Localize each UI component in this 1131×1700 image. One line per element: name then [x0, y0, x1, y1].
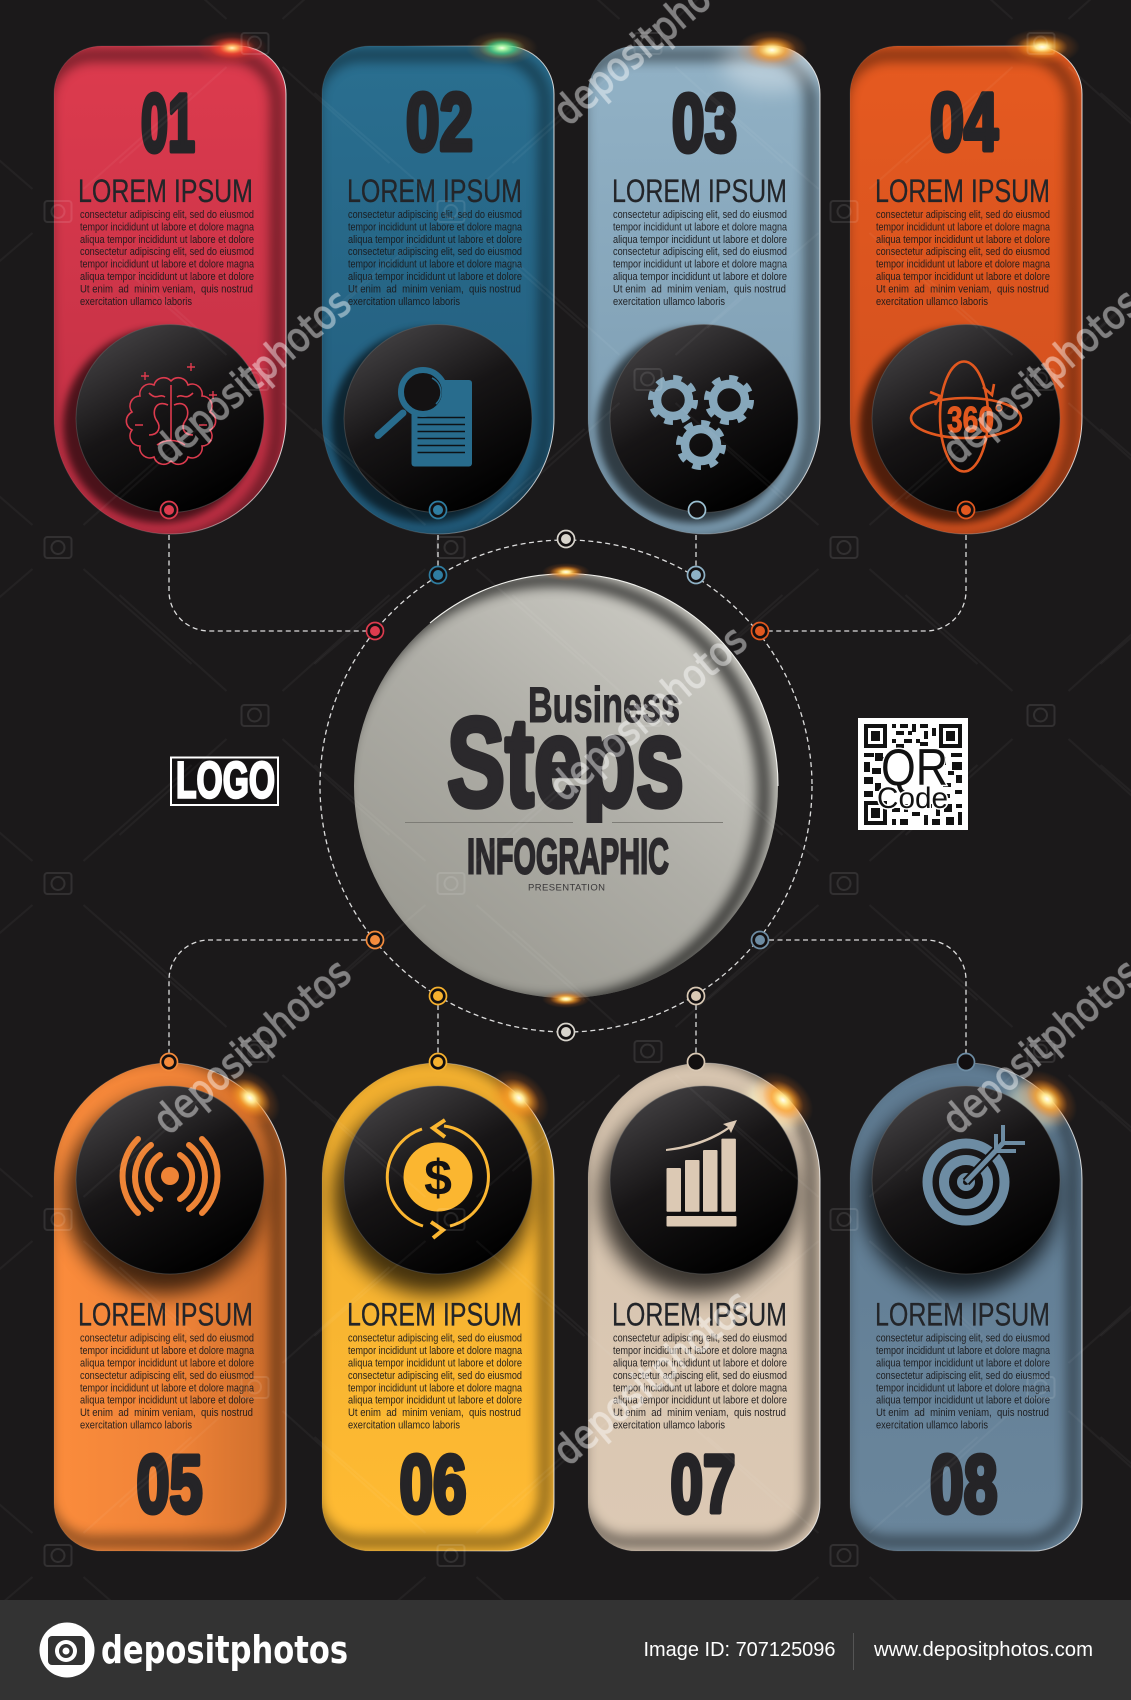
watermark text: depositphotos: [145, 280, 360, 474]
body text: aliqua tempor incididunt ut labore et dolore: [876, 1395, 1050, 1407]
connector dot: [688, 1054, 704, 1070]
QR code: Code: [877, 782, 948, 815]
glow: [1006, 1059, 1088, 1139]
body text: exercitation ullamco laboris: [348, 1420, 460, 1432]
body text: tempor incididunt ut labore et dolore magna: [876, 1345, 1051, 1357]
body text: aliqua tempor incididunt ut labore et dolore: [613, 1358, 787, 1370]
icon: magnifier and document: [378, 370, 472, 466]
body text: Ut enim ad minim veniam, quis nostrud: [613, 283, 786, 295]
number: 01: [141, 78, 195, 169]
body text: tempor incididunt ut labore et dolore magna: [348, 1382, 523, 1394]
number: 03: [672, 78, 737, 169]
glow: [742, 1060, 824, 1140]
panel: step 05 orange: [45, 1054, 291, 1551]
body text: aliqua tempor incididunt ut labore et dolore: [613, 234, 787, 246]
body text: Ut enim ad minim veniam, quis nostrud: [348, 283, 521, 295]
body text: exercitation ullamco laboris: [348, 296, 460, 308]
body text: aliqua tempor incididunt ut labore et dolore: [348, 234, 522, 246]
watermark text: depositphotos: [541, 617, 756, 811]
body text: Ut enim ad minim veniam, quis nostrud: [613, 1407, 786, 1419]
central circle: [340, 563, 778, 1008]
glow: [478, 1058, 560, 1138]
footer bar: [0, 1600, 1131, 1700]
number: 04: [930, 77, 998, 168]
footer wordmark: depositphotos: [101, 1628, 348, 1672]
connector dot: [160, 1054, 178, 1070]
QR code: [858, 718, 968, 830]
body text: consectetur adipiscing elit, sed do eiusmod: [80, 1333, 254, 1345]
body text: Ut enim ad minim veniam, quis nostrud: [876, 1407, 1049, 1419]
glow: [209, 1058, 291, 1138]
disc: [76, 1086, 264, 1274]
body text: consectetur adipiscing elit, sed do eiusmod: [876, 1370, 1050, 1382]
icon: growth bar chart: [666, 1120, 737, 1226]
body text: consectetur adipiscing elit, sed do eiusmod: [348, 1333, 522, 1345]
heading: LOREM IPSUM: [347, 1296, 522, 1332]
body text: exercitation ullamco laboris: [80, 296, 192, 308]
watermark text: depositphotos: [145, 950, 360, 1144]
body text: aliqua tempor incididunt ut labore et dolore: [876, 271, 1050, 283]
dashed connector network: [169, 518, 966, 1054]
panel: step 02 blue: [313, 31, 554, 543]
body text: aliqua tempor incididunt ut labore et dolore: [348, 1395, 522, 1407]
number: 08: [930, 1439, 998, 1530]
body text: consectetur adipiscing elit, sed do eiusmod: [348, 246, 522, 258]
body text: exercitation ullamco laboris: [613, 296, 725, 308]
disc: [872, 1086, 1060, 1274]
panel: step 08 steel blue: [841, 1054, 1088, 1551]
body text: tempor incididunt ut labore et dolore magna: [613, 259, 788, 271]
icon: footer camera logo: [40, 1622, 94, 1678]
footer url: www.depositphotos.com: [873, 1639, 1093, 1661]
body text: tempor incididunt ut labore et dolore magna: [876, 259, 1051, 271]
icon: dollar coin with arrows: $: [424, 1150, 452, 1206]
body text: aliqua tempor incididunt ut labore et dolore: [876, 234, 1050, 246]
body text: [613, 209, 788, 308]
body text: consectetur adipiscing elit, sed do eiusmod: [80, 246, 254, 258]
body text: exercitation ullamco laboris: [613, 1420, 725, 1432]
body text: exercitation ullamco laboris: [876, 1420, 988, 1432]
title: Business: Business: [528, 677, 680, 733]
connector dot: [958, 1054, 974, 1070]
body text: consectetur adipiscing elit, sed do eiusmod: [348, 1370, 522, 1382]
body text: tempor incididunt ut labore et dolore magna: [613, 221, 788, 233]
body text: [348, 1333, 523, 1432]
icon: gears: [651, 378, 751, 467]
glow: top: [542, 563, 590, 581]
body text: tempor incididunt ut labore et dolore magna: [613, 1382, 788, 1394]
body text: aliqua tempor incididunt ut labore et dolore: [80, 1395, 254, 1407]
heading: LOREM IPSUM: [78, 1296, 253, 1332]
panel: step 01 red: [45, 31, 286, 543]
icon: signal broadcast: [123, 1139, 217, 1213]
body text: tempor incididunt ut labore et dolore magna: [348, 259, 523, 271]
body text: aliqua tempor incididunt ut labore et dolore: [613, 1395, 787, 1407]
disc: [344, 324, 532, 512]
icon: 360 rotation: [911, 362, 1021, 472]
panel: step 03 light blue: [579, 30, 822, 543]
body text: tempor incididunt ut labore et dolore magna: [876, 1382, 1051, 1394]
QR label: QR: [881, 739, 948, 797]
logo: LOGO: [176, 752, 275, 808]
body text: consectetur adipiscing elit, sed do eiusmod: [613, 209, 787, 221]
body text: consectetur adipiscing elit, sed do eiusmod: [613, 1333, 787, 1345]
heading: LOREM IPSUM: [875, 1296, 1050, 1332]
body text: aliqua tempor incididunt ut labore et dolore: [80, 271, 254, 283]
body text: Ut enim ad minim veniam, quis nostrud: [80, 1407, 253, 1419]
body text: [613, 1333, 788, 1432]
connector dot: [958, 502, 974, 518]
number: 05: [136, 1439, 202, 1530]
panel: step 07 beige: [579, 1054, 824, 1551]
heading: LOREM IPSUM: [875, 173, 1050, 209]
heading: LOREM IPSUM: [78, 173, 253, 209]
body text: aliqua tempor incididunt ut labore et dolore: [348, 271, 522, 283]
panel: step 06 yellow: [313, 1054, 560, 1551]
connector dot: [160, 502, 178, 518]
icon: brain: [126, 363, 217, 464]
body text: tempor incididunt ut labore et dolore magna: [80, 1382, 255, 1394]
connector dot: [430, 502, 446, 518]
body text: consectetur adipiscing elit, sed do eiusmod: [876, 209, 1050, 221]
title rule: [405, 822, 723, 824]
body text: consectetur adipiscing elit, sed do eiusmod: [876, 246, 1050, 258]
heading: LOREM IPSUM: [347, 173, 522, 209]
body text: tempor incididunt ut labore et dolore magna: [348, 221, 523, 233]
body text: tempor incididunt ut labore et dolore magna: [348, 1345, 523, 1357]
body text: [80, 1333, 255, 1432]
body text: aliqua tempor incididunt ut labore et dolore: [876, 1358, 1050, 1370]
body text: aliqua tempor incididunt ut labore et dolore: [348, 1358, 522, 1370]
number: 06: [400, 1439, 466, 1530]
body text: tempor incididunt ut labore et dolore magna: [80, 1345, 255, 1357]
body text: [348, 209, 523, 308]
icon: target with arrow: [928, 1125, 1025, 1220]
body text: aliqua tempor incididunt ut labore et dolore: [80, 234, 254, 246]
heading: LOREM IPSUM: [612, 173, 787, 209]
watermark text: depositphotos: [545, 1281, 760, 1475]
body text: aliqua tempor incididunt ut labore et dolore: [613, 271, 787, 283]
body text: [80, 209, 255, 308]
body text: aliqua tempor incididunt ut labore et dolore: [80, 1358, 254, 1370]
body text: tempor incididunt ut labore et dolore magna: [80, 259, 255, 271]
panel: step 04 orange-red: [841, 29, 1082, 543]
body text: Ut enim ad minim veniam, quis nostrud: [80, 283, 253, 295]
glow: [196, 31, 268, 65]
body text: Ut enim ad minim veniam, quis nostrud: [876, 283, 1049, 295]
disc: [76, 324, 264, 512]
body text: consectetur adipiscing elit, sed do eiusmod: [613, 1370, 787, 1382]
body text: [876, 209, 1051, 308]
body text: tempor incididunt ut labore et dolore magna: [613, 1345, 788, 1357]
connector dot: [430, 1054, 446, 1070]
body text: exercitation ullamco laboris: [80, 1420, 192, 1432]
body text: consectetur adipiscing elit, sed do eiusmod: [348, 209, 522, 221]
glow: [466, 31, 538, 65]
disc: [610, 1086, 798, 1274]
subtitle: PRESENTATION: [528, 882, 605, 894]
body text: consectetur adipiscing elit, sed do eiusmod: [876, 1333, 1050, 1345]
disc: [610, 324, 798, 512]
body text: consectetur adipiscing elit, sed do eiusmod: [80, 209, 254, 221]
ring nodes: [366, 530, 768, 1040]
logo: [171, 752, 278, 808]
body text: consectetur adipiscing elit, sed do eiusmod: [613, 246, 787, 258]
glow: [736, 30, 808, 70]
disc: [872, 324, 1060, 512]
number: 07: [670, 1439, 736, 1530]
body text: [876, 1333, 1051, 1432]
body text: Ut enim ad minim veniam, quis nostrud: [348, 1407, 521, 1419]
watermark text: [145, 0, 1131, 1475]
body text: tempor incididunt ut labore et dolore magna: [876, 221, 1051, 233]
connector dot: [688, 502, 706, 518]
icon: dollar coin with arrows: [387, 1120, 488, 1238]
title: Steps: Steps: [447, 692, 684, 833]
body text: tempor incididunt ut labore et dolore magna: [80, 221, 255, 233]
title: INFOGRAPHIC: INFOGRAPHIC: [467, 828, 669, 884]
glow: [1004, 29, 1080, 65]
disc: [344, 1086, 532, 1274]
body text: consectetur adipiscing elit, sed do eiusmod: [80, 1370, 254, 1382]
glow: bottom: [542, 990, 590, 1008]
icon: 360 rotation: 360: [947, 399, 994, 440]
number: 02: [406, 77, 473, 168]
body text: exercitation ullamco laboris: [876, 296, 988, 308]
heading: LOREM IPSUM: [612, 1296, 787, 1332]
footer image id: Image ID: 707125096: [644, 1639, 836, 1661]
